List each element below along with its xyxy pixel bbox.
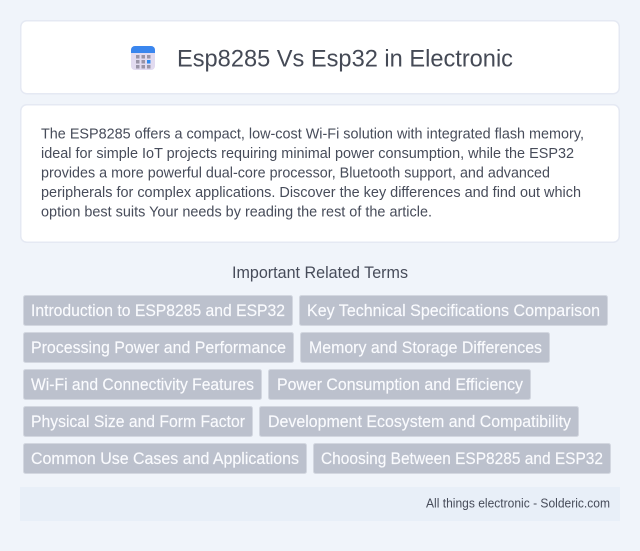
chip: use cases: Common Use Cases and Applications: [31, 450, 299, 468]
description text: ideal for simple IoT projects requiring minimal power consumption, while the ESP32: [41, 146, 574, 162]
chip: power: Power Consumption and Efficiency: [277, 376, 524, 394]
chip: specifications: [300, 296, 608, 326]
icon: calendar grid: [131, 46, 155, 70]
term chips: [24, 296, 610, 474]
footer text: All things electronic - Solderic.com: [426, 496, 610, 510]
chip: physical size: Physical Size and Form Factor: [31, 413, 245, 431]
chip: wi-fi: [24, 370, 262, 400]
chip: memory: Memory and Storage Differences: [309, 339, 542, 357]
description text: option best suits Your needs by reading the rest of the article.: [41, 204, 432, 220]
chip: ecosystem: [260, 406, 578, 436]
panel: description: [21, 105, 619, 242]
chip: processing: [24, 332, 294, 362]
chip: ecosystem: Development Ecosystem and Compatibility: [268, 413, 572, 431]
chip: introduction: Introduction to ESP8285 and ESP32: [31, 302, 285, 320]
chip: use cases: [24, 444, 306, 474]
description text: provides a more powerful dual-core processor, Bluetooth support, and advanced: [41, 166, 550, 182]
chip: physical size: [24, 406, 252, 436]
chip: power: [268, 370, 530, 400]
description text: The ESP8285 offers a compact, low-cost Wi-Fi solution with integrated flash memory,: [41, 126, 584, 142]
chip: choosing: [314, 444, 610, 474]
chip: introduction: [24, 296, 292, 326]
title: Esp8285 Vs Esp32 in Electronic: [177, 46, 513, 72]
description text: [41, 126, 584, 220]
header panel: [21, 21, 619, 94]
chip: wi-fi: Wi-Fi and Connectivity Features: [31, 376, 254, 394]
description text: peripherals for complex applications. Discover the key differences and find out which: [41, 185, 581, 201]
heading: important related terms: Important Related Terms: [232, 264, 408, 282]
footer bar: [20, 487, 620, 521]
chip: processing: Processing Power and Performance: [31, 339, 286, 357]
chip: choosing: Choosing Between ESP8285 and ESP32: [321, 450, 603, 468]
chip: specifications: Key Technical Specifications Comparison: [307, 302, 600, 320]
chip: memory: [300, 332, 550, 362]
